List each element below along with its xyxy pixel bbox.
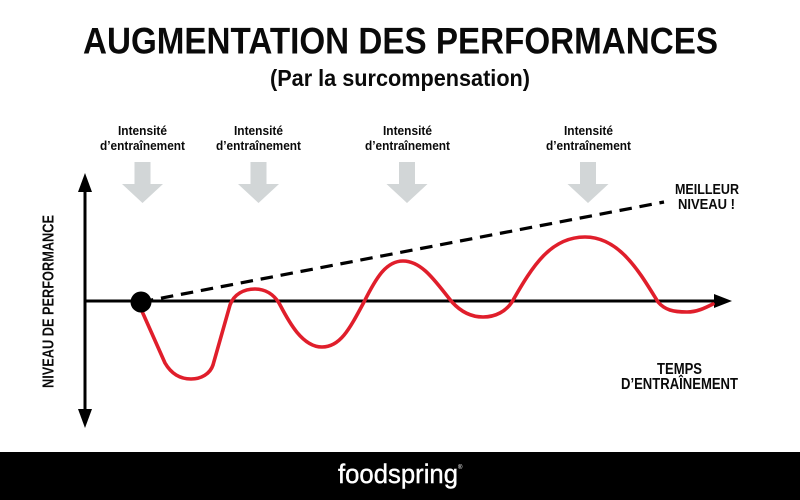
label: best level [675,181,739,213]
label: y axis: NIVEAU DE PERFORMANCE [40,215,58,388]
group: intensity markers [100,123,632,203]
label: training time [621,361,738,393]
title: AUGMENTATION DES PERFORMANCES [83,20,718,62]
subtitle: (Par la surcompensation) [270,65,530,91]
curve: performance [141,237,713,379]
label: intensity 4: Intensité [564,123,613,138]
start point [130,292,152,312]
logo: foodspring: foodspring [338,459,458,489]
label: best level: MEILLEUR [675,181,739,198]
label: training 3: d’entraînement [365,138,451,153]
label: intensity 3: Intensité [383,123,432,138]
label: intensity 2: Intensité [234,123,283,138]
label: training time: TEMPS [657,361,702,378]
footer bar [0,452,800,500]
icon: arrow 2 [238,162,279,203]
label: training 2: d’entraînement [216,138,302,153]
label: training time: D’ENTRAÎNEMENT [621,375,738,393]
chart: performance [78,173,732,428]
y axis [78,173,92,428]
icon: arrow 1 [122,162,163,203]
icon: arrow 4 [568,162,608,203]
label: training 1: d’entraînement [100,138,186,153]
label: best level: NIVEAU ! [678,196,735,213]
label: intensity 1: Intensité [118,123,167,138]
label: training 4: d’entraînement [546,138,632,153]
dashed line: best level [141,202,664,302]
x axis [85,294,732,308]
logo: foodspring: ® [458,464,463,471]
icon: arrow 3 [386,162,428,203]
